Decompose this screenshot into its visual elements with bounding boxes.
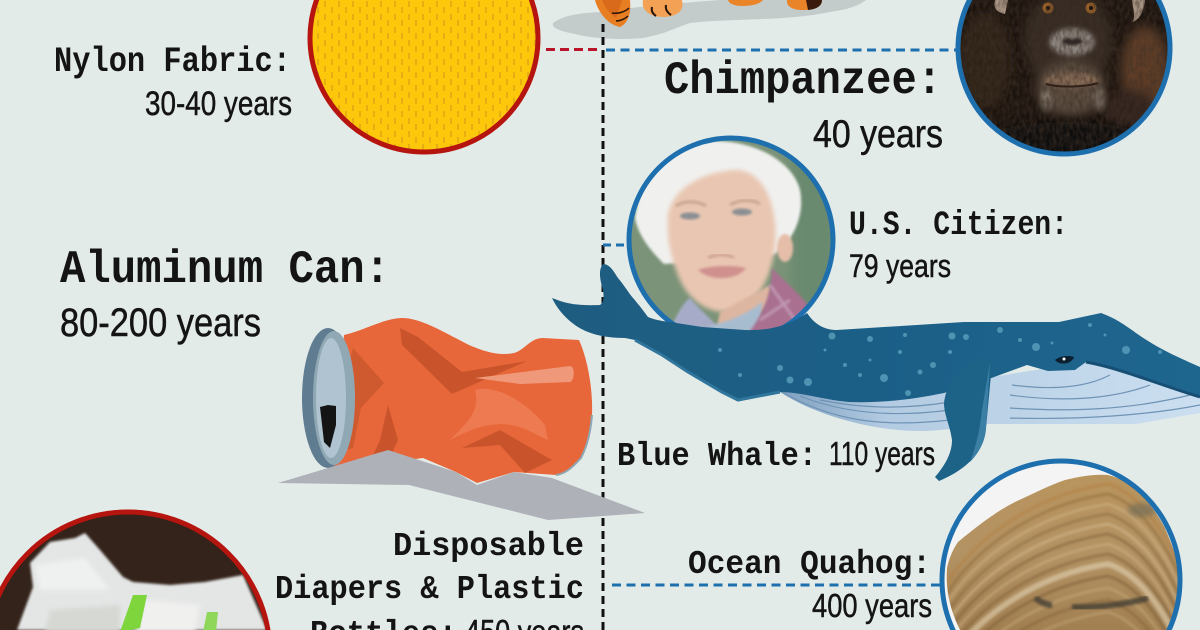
- connector: citizen: [603, 244, 628, 246]
- chimpanzee photo: [955, 0, 1175, 162]
- chimpanzee years: 40 years: [813, 113, 943, 156]
- nylon label: Nylon Fabric:: [54, 42, 291, 82]
- connector: quahog: [612, 584, 940, 586]
- U.S. citizen photo: [629, 138, 840, 342]
- diapers label: Disposable: [393, 528, 584, 565]
- crushed can illustration: [278, 318, 645, 520]
- aluminum can label: Aluminum Can:: [60, 244, 390, 296]
- ocean quahog label: Ocean Quahog:: [688, 546, 931, 583]
- blue whale illustration: [552, 264, 1200, 481]
- diaper photo: [0, 512, 270, 630]
- blue whale years: 110 years: [829, 435, 935, 472]
- ocean quahog photo: [940, 461, 1190, 630]
- vertical timeline: [602, 24, 604, 630]
- blue whale label: Blue Whale:: [617, 438, 817, 475]
- U.S. citizen years: 79 years: [849, 248, 951, 284]
- diapers label: Diapers & Plastic: [275, 571, 584, 608]
- chimpanzee label: Chimpanzee:: [664, 55, 942, 107]
- diapers label: [275, 528, 584, 630]
- ocean quahog years: 400 years: [812, 587, 932, 624]
- connector: chimpanzee: [606, 48, 957, 52]
- aluminum can years: 80-200 years: [60, 301, 261, 345]
- nylon fabric photo: [310, 0, 538, 152]
- nylon years: 30-40 years: [145, 85, 292, 123]
- connector: nylon: [546, 48, 602, 51]
- U.S. citizen label: U.S. Citizen:: [849, 207, 1068, 245]
- tiger paws on shadow: [553, 0, 866, 39]
